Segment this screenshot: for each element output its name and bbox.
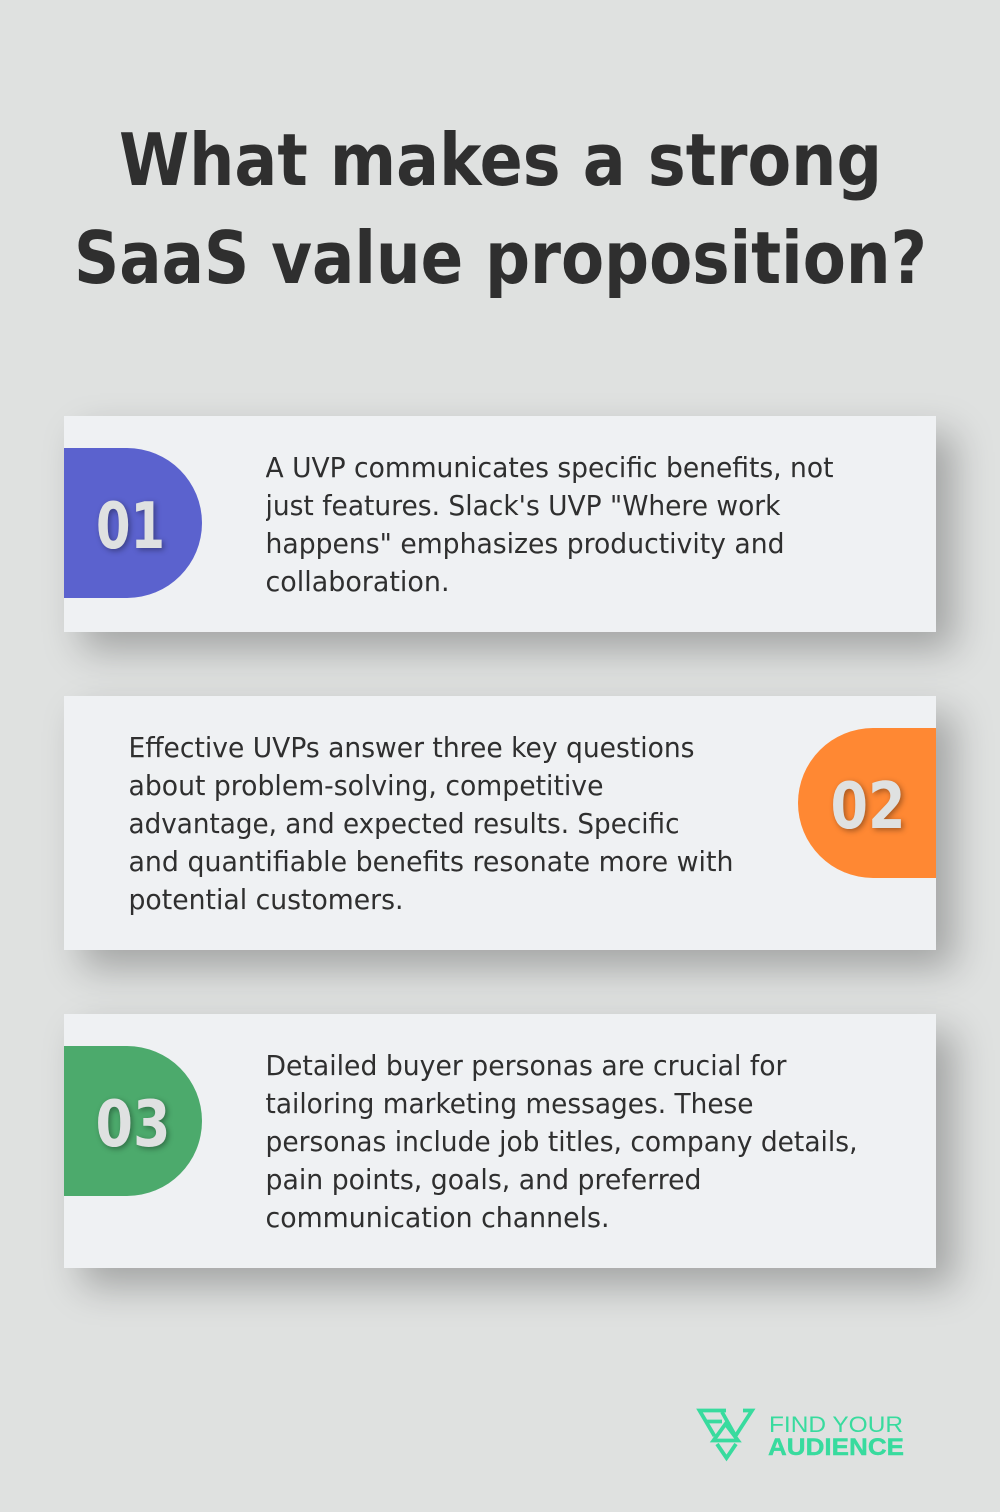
wordmark bbox=[768, 1412, 904, 1461]
badge: 03 bbox=[64, 1046, 202, 1196]
text: card 03 description: communication channels. bbox=[266, 1201, 610, 1234]
badge: 02: 02 bbox=[830, 770, 906, 844]
text: card 02 description: and quantifiable benefits resonate more with bbox=[128, 845, 734, 878]
text: card 01 description bbox=[266, 451, 834, 598]
text: card 02 description: advantage, and expected results. Specific bbox=[128, 807, 680, 840]
text: card 03 description: Detailed buyer personas are crucial for bbox=[266, 1049, 787, 1082]
text: card 03 description: tailoring marketing messages. These bbox=[266, 1087, 754, 1120]
panel: card 01 bbox=[64, 416, 936, 632]
panel: card 02 bbox=[64, 696, 936, 950]
icon: triangle mark bbox=[700, 1410, 752, 1458]
badge: 01: 01 bbox=[96, 490, 165, 564]
text: card 01 description: just features. Slack's UVP "Where work bbox=[266, 489, 781, 522]
title bbox=[74, 118, 927, 300]
text: card 02 description bbox=[128, 731, 734, 916]
badge: 03: 03 bbox=[96, 1088, 170, 1162]
text: card 02 description: potential customers. bbox=[128, 883, 404, 916]
wordmark: AUDIENCE bbox=[768, 1434, 904, 1461]
text: card 03 description bbox=[266, 1049, 858, 1234]
logo: Find Your Audience bbox=[696, 1408, 904, 1462]
text: card 01 description: collaboration. bbox=[266, 565, 450, 598]
wordmark: FIND YOUR bbox=[769, 1412, 903, 1437]
text: card 02 description: Effective UVPs answer three key questions bbox=[128, 731, 694, 764]
text: card 03 description: personas include job titles, company details, bbox=[266, 1125, 858, 1158]
text: card 02 description: about problem-solving, competitive bbox=[128, 769, 604, 802]
panel: card 03 bbox=[64, 1014, 936, 1268]
text: card 01 description: happens" emphasizes productivity and bbox=[266, 527, 784, 560]
badge: 02 bbox=[798, 728, 936, 878]
text: card 03 description: pain points, goals, and preferred bbox=[266, 1163, 702, 1196]
title: What makes a strong bbox=[119, 118, 882, 202]
text: card 01 description: A UVP communicates specific benefits, not bbox=[266, 451, 834, 484]
badge: 01 bbox=[64, 448, 202, 598]
